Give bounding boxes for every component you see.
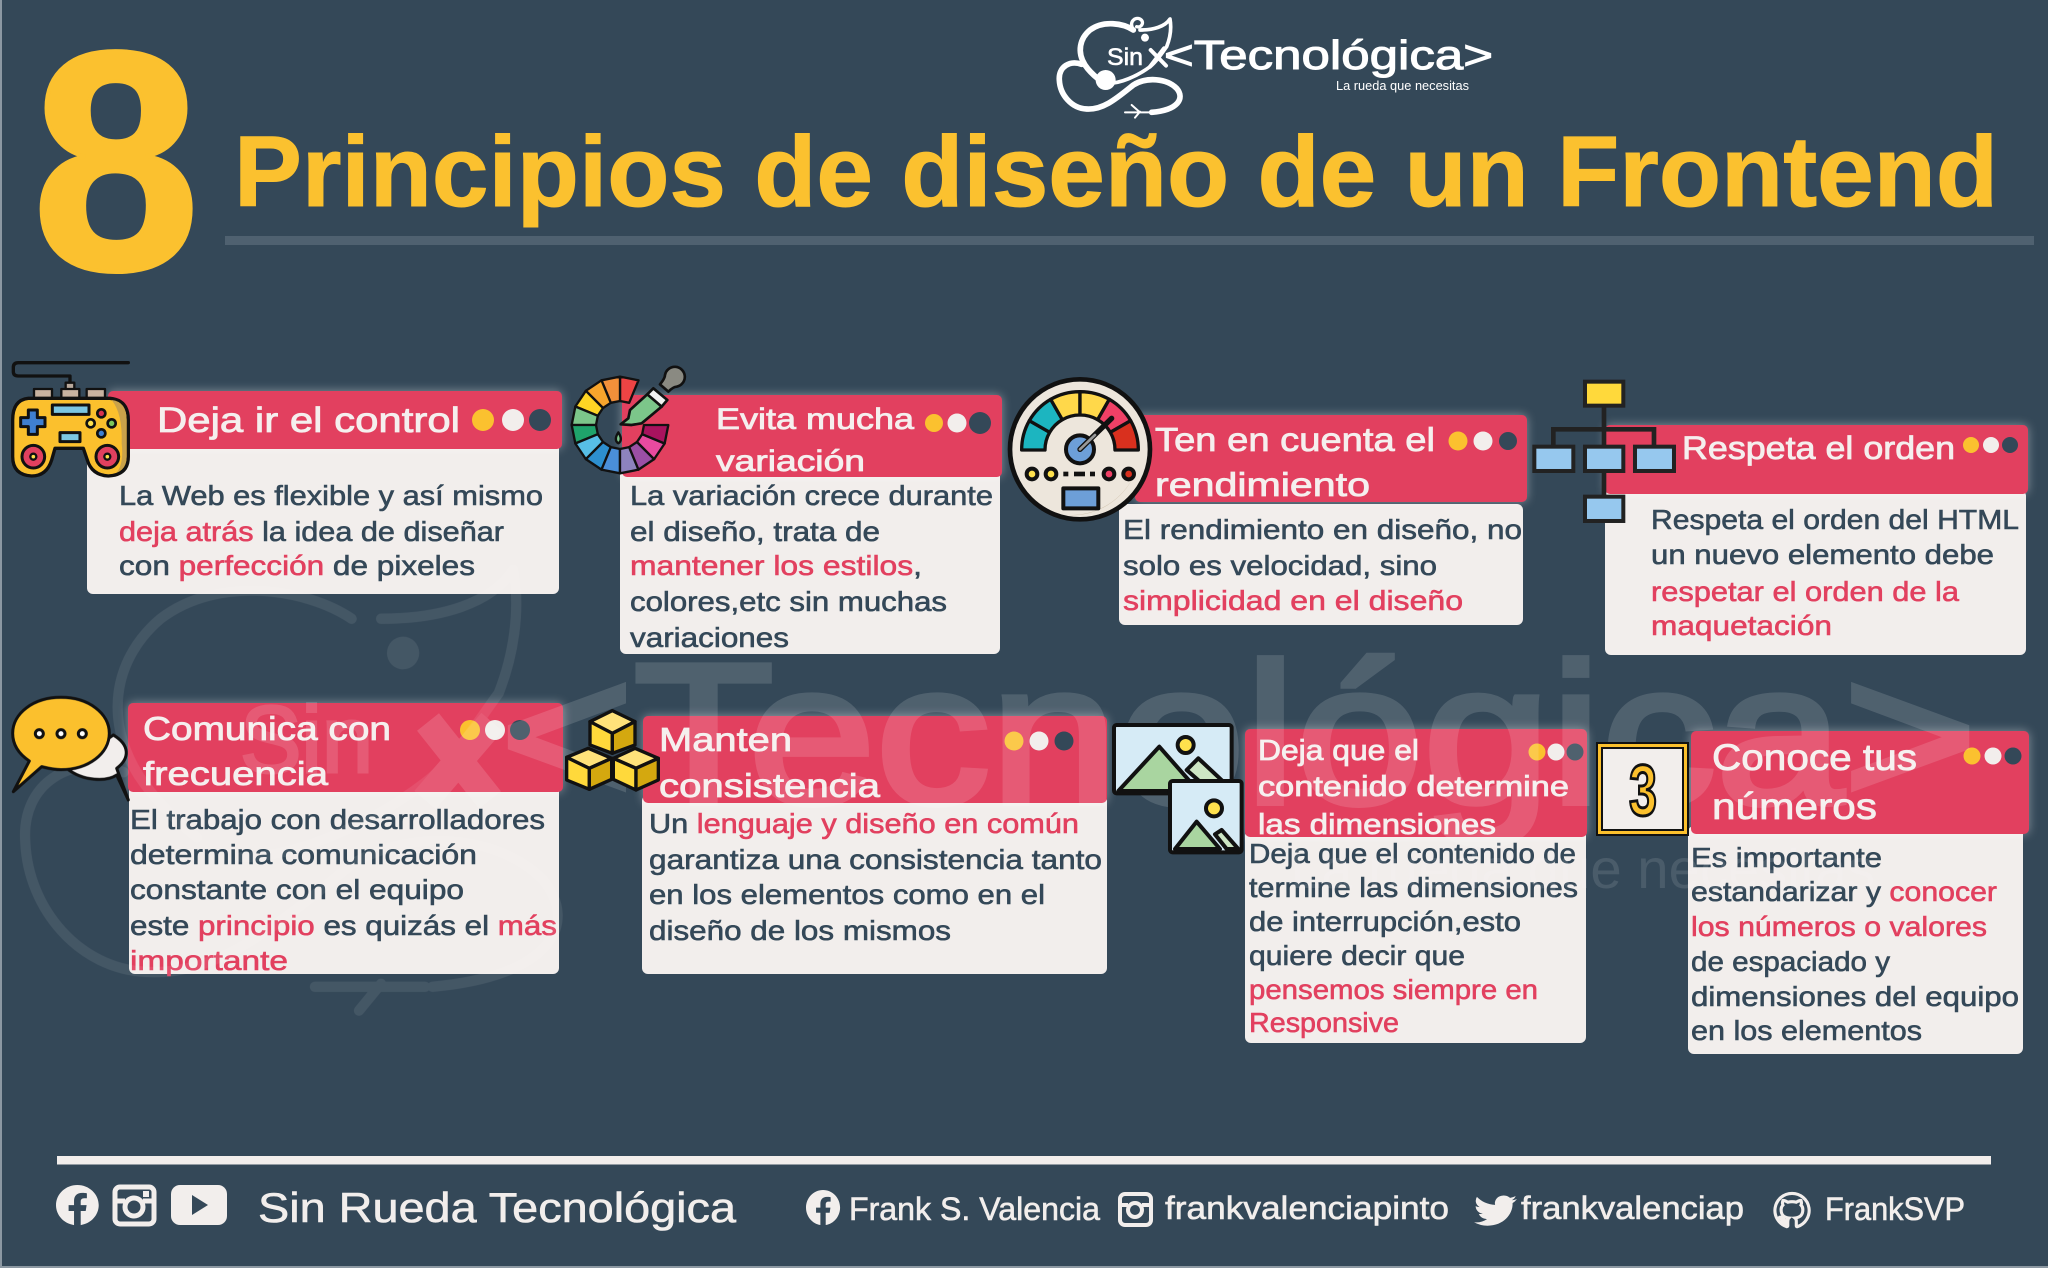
icon: facebook (56, 1185, 99, 1225)
panel: Deja que el contenido determine las dimensiones: contenido determine (1258, 771, 1569, 803)
icon: images (1114, 725, 1242, 852)
panel: Ten en cuenta el rendimiento: simplicidad en el diseño (1123, 585, 1463, 616)
panel: Evita mucha variación: el diseño, trata de (630, 516, 880, 547)
panel: Conoce tus números: Es importante (1691, 842, 1882, 873)
panel: Comunica con frecuencia: importante (130, 945, 288, 976)
panel: Manten consistencia: Un lenguaje y diseño en común (649, 808, 1079, 839)
logo: Sin Rueda Tecnológica (1059, 18, 1493, 118)
panel: Evita mucha variación: mantener los estilos , (630, 550, 922, 581)
panel: Manten consistencia: consistencia (659, 767, 881, 804)
instagram handle: frankvalenciapinto (1165, 1190, 1449, 1226)
panel: Conoce tus números (1688, 731, 2029, 1054)
logo: Sin Rueda Tecnológica: Sin (1107, 44, 1143, 71)
panel: Manten consistencia: en los elementos como en el (649, 879, 1045, 910)
panel: Manten consistencia: diseño de los mismos (649, 915, 951, 946)
panel: Deja que el contenido determine las dimensiones: de interrupción,esto (1249, 906, 1521, 937)
panel: Conoce tus números: estandarizar y conocer (1691, 876, 1997, 907)
panel: Respeta el orden (1605, 425, 2028, 655)
panel: Deja que el contenido determine las dimensiones: Responsive (1249, 1007, 1399, 1038)
panel: Respeta el orden: Respeta el orden (1682, 430, 1955, 466)
icon: speedometer gauge (1010, 379, 1150, 519)
panel: Deja ir el control: Deja ir el control (157, 401, 460, 440)
twitter handle: frankvalenciap (1521, 1190, 1744, 1226)
panel: Ten en cuenta el rendimiento: solo es velocidad, sino (1123, 550, 1437, 581)
logo: Sin Rueda Tecnológica: <Tecnológica> (1164, 32, 1493, 78)
panel: Ten en cuenta el rendimiento: rendimiento (1155, 466, 1370, 503)
panel: Deja ir el control: con perfección de pixeles (119, 550, 475, 581)
panel: Evita mucha variación: La variación crece durante (630, 480, 993, 511)
panel: Comunica con frecuencia: El trabajo con desarrolladores (130, 804, 545, 835)
panel: Evita mucha variación (620, 395, 1002, 654)
panel: Comunica con frecuencia (128, 703, 563, 976)
icon: facebook small (806, 1190, 840, 1225)
panel: Comunica con frecuencia: frecuencia (143, 755, 329, 792)
title: Principios de diseño de un Frontend (234, 116, 1998, 228)
panel: Conoce tus números: números (1712, 786, 1877, 827)
panel: Deja que el contenido determine las dimensiones: quiere decir que (1249, 940, 1465, 971)
panel: Evita mucha variación: colores,etc sin muchas (630, 586, 947, 617)
panel: Manten consistencia: Manten (659, 721, 792, 758)
icon: stacked cubes (567, 711, 658, 790)
github handle: FrankSVP (1825, 1191, 1965, 1227)
panel: Respeta el orden: un nuevo elemento debe (1651, 539, 1994, 570)
icon: colour wheel with dropper (572, 367, 685, 473)
panel: Deja que el contenido determine las dimensiones: Deja que el (1258, 735, 1419, 767)
icon: hierarchy tree (1534, 382, 1674, 521)
footer channel name: Sin Rueda Tecnológica (258, 1184, 737, 1231)
logo: Sin Rueda Tecnológica: La rueda que necesitas (1336, 79, 1469, 93)
panel: Conoce tus números: Conoce tus (1712, 737, 1917, 778)
icon: game controller (13, 363, 128, 476)
icon: number 3 (1596, 742, 1689, 836)
panel: Ten en cuenta el rendimiento: El rendimiento en diseño, no (1123, 514, 1522, 545)
panel: Deja ir el control: La Web es flexible y así mismo (119, 480, 543, 511)
panel: Evita mucha variación: variación (716, 445, 865, 478)
panel: Evita mucha variación: Evita mucha (716, 403, 914, 436)
icon: chat bubbles (13, 697, 128, 800)
panel: Conoce tus números: de espaciado y (1691, 946, 1890, 977)
title underline (225, 236, 2034, 245)
panel: Comunica con frecuencia: constante con el equipo (130, 874, 464, 905)
panel: Comunica con frecuencia: determina comunicación (130, 839, 477, 870)
panel: Conoce tus números: dimensiones del equipo (1691, 981, 2019, 1012)
panel: Respeta el orden: Respeta el orden del HTML (1651, 504, 2019, 535)
panel: Deja ir el control: deja atrás la idea de diseñar (119, 516, 504, 547)
facebook handle: Frank S. Valencia (849, 1191, 1100, 1227)
watermark logo: <Tecnológica> (500, 623, 1977, 846)
icon: twitter (1474, 1195, 1517, 1226)
panel: Deja ir el control (87, 391, 562, 594)
icon: youtube (171, 1185, 227, 1225)
panel: Deja que el contenido determine las dimensiones: pensemos siempre en (1249, 974, 1538, 1005)
icon: instagram small (1120, 1194, 1151, 1225)
panel: Deja que el contenido determine las dimensiones (1245, 729, 1587, 1043)
watermark logo (25, 570, 1977, 1011)
icon: instagram (115, 1187, 154, 1224)
panel: Manten consistencia (642, 716, 1107, 974)
icon: number 3: 3 (1629, 751, 1657, 831)
panel: Respeta el orden: respetar el orden de la (1651, 576, 1959, 607)
panel: Conoce tus números: en los elementos (1691, 1015, 1922, 1046)
panel: Ten en cuenta el rendimiento (1119, 415, 1527, 625)
panel: Comunica con frecuencia: este principio es quizás el más (130, 910, 557, 941)
panel: Deja que el contenido determine las dimensiones: las dimensiones (1258, 809, 1496, 841)
panel: Respeta el orden: maquetación (1651, 610, 1832, 641)
panel: Comunica con frecuencia: Comunica con (143, 710, 391, 747)
panel: Ten en cuenta el rendimiento: Ten en cuenta el (1155, 421, 1435, 458)
footer divider (57, 1156, 1991, 1164)
panel: Deja que el contenido determine las dimensiones: termine las dimensiones (1249, 872, 1578, 903)
panel: Manten consistencia: garantiza una consistencia tanto (649, 844, 1102, 875)
icon: github (1775, 1193, 1809, 1227)
watermark logo: La rueda que necesitas (1290, 837, 1875, 900)
panel: Deja que el contenido determine las dimensiones: Deja que el contenido de (1249, 838, 1576, 869)
watermark logo: Sin (240, 687, 373, 793)
panel: Conoce tus números: los números o valores (1691, 911, 1987, 942)
panel: Evita mucha variación: variaciones (630, 622, 789, 653)
